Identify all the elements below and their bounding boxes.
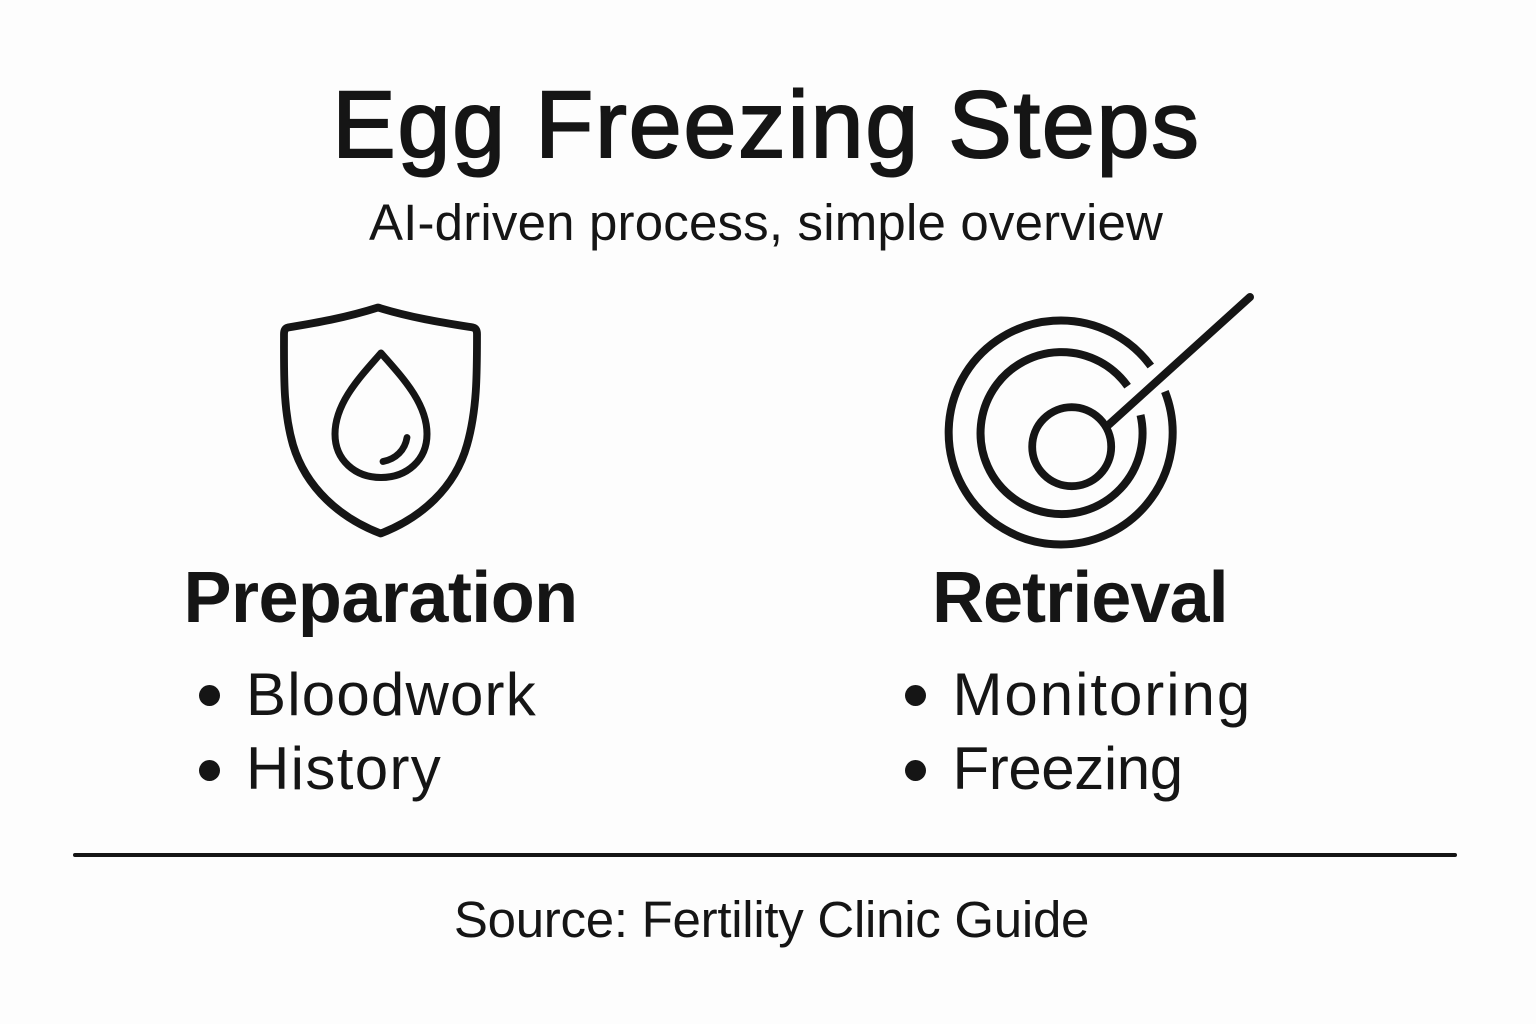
bullet item: Freezing: Freezing — [952, 735, 1183, 802]
bullet item: Bloodwork: Bloodwork — [246, 661, 537, 728]
title: Egg Freezing Steps — [332, 72, 1201, 178]
icon: shield with drop — [280, 304, 481, 538]
subtitle: AI-driven process, simple overview — [369, 194, 1163, 251]
heading: Preparation: Preparation — [184, 558, 578, 638]
heading: Retrieval: Retrieval — [932, 558, 1228, 638]
bullet item: Monitoring: Monitoring — [952, 661, 1252, 728]
source note: Source: Fertility Clinic Guide — [454, 890, 1089, 948]
list: retrieval items — [905, 661, 1252, 802]
icon: target with probe — [944, 293, 1254, 548]
list: preparation items — [199, 661, 537, 802]
bullet item: History: History — [246, 735, 442, 802]
